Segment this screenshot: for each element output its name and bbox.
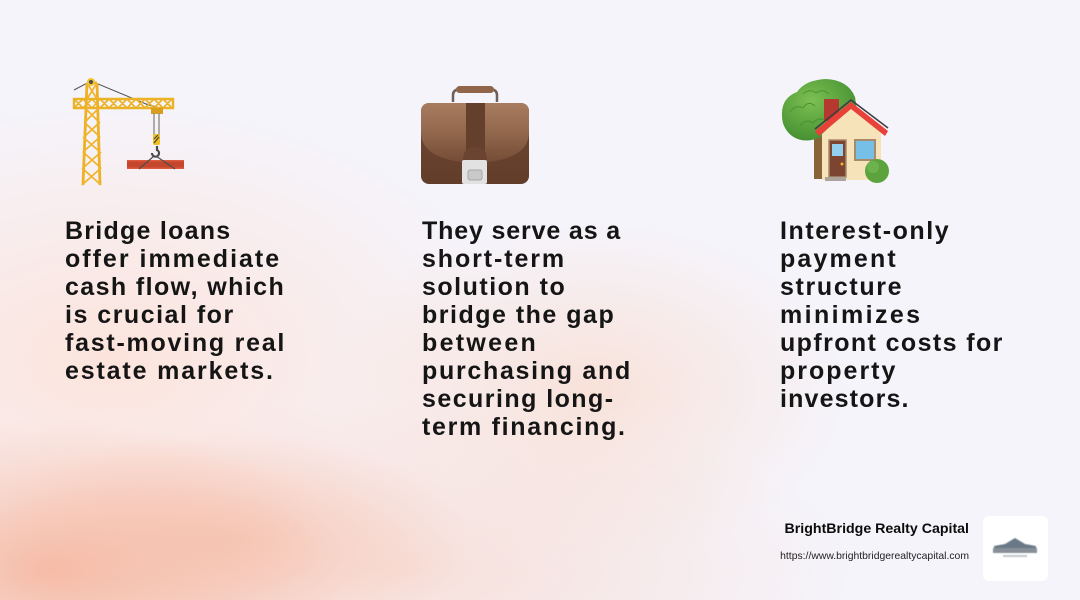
text: short-term solution: They serve as a — [422, 217, 621, 245]
company name: BrightBridge Realty Capital — [785, 521, 969, 537]
text: interest-only: investors. — [780, 385, 910, 413]
text: short-term solution: solution to — [422, 273, 566, 301]
text: bridge loans: offer immediate — [65, 245, 281, 273]
text: interest-only — [780, 217, 1004, 413]
text: short-term solution: bridge the gap — [422, 301, 615, 329]
text: interest-only: payment — [780, 245, 898, 273]
text: interest-only: Interest-only — [780, 217, 950, 245]
company url: https://www.brightbridgerealtycapital.com — [780, 551, 969, 562]
text: bridge loans: fast-moving real — [65, 329, 286, 357]
text: interest-only: minimizes — [780, 301, 922, 329]
text: bridge loans: cash flow, which — [65, 273, 285, 301]
text: short-term solution: between — [422, 329, 538, 357]
text: bridge loans: is crucial for — [65, 301, 235, 329]
text: short-term solution: securing long- — [422, 385, 615, 413]
icon: briefcase — [421, 86, 529, 184]
text: short-term solution: term financing. — [422, 413, 627, 441]
text: bridge loans — [65, 217, 286, 385]
text: short-term solution: short-term — [422, 245, 566, 273]
icon: construction crane — [72, 78, 184, 186]
icon: company logo — [992, 538, 1038, 558]
text: interest-only: property — [780, 357, 897, 385]
text: bridge loans: Bridge loans — [65, 217, 231, 245]
text: interest-only: structure — [780, 273, 903, 301]
text: short-term solution: purchasing and — [422, 357, 632, 385]
text: bridge loans: estate markets. — [65, 357, 275, 385]
logo card — [983, 516, 1048, 581]
icon: house with tree — [782, 79, 889, 183]
text: short-term solution — [422, 217, 632, 441]
text: interest-only: upfront costs for — [780, 329, 1004, 357]
